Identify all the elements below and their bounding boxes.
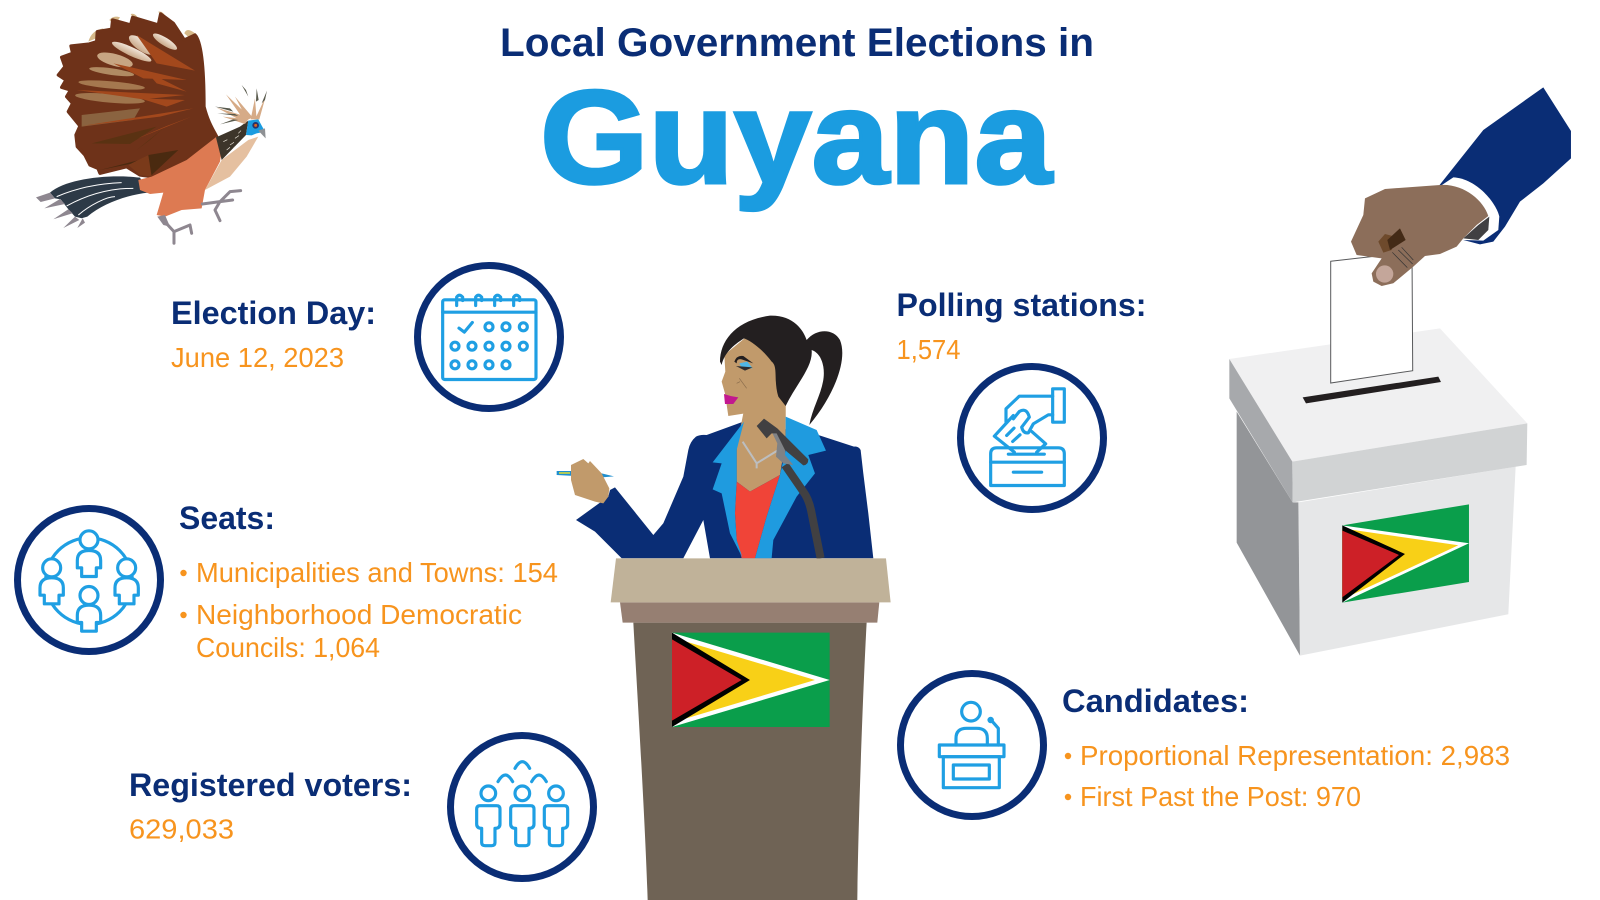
panel: candidates xyxy=(900,674,1510,816)
bullet list: Councils: 1,064 xyxy=(196,632,380,663)
icon: calendar xyxy=(418,266,560,408)
heading: Registered voters: xyxy=(129,767,412,803)
heading: Election Day: xyxy=(171,295,376,331)
icon: group of voters xyxy=(450,736,594,878)
flag on podium xyxy=(672,633,830,727)
bullet list xyxy=(1065,740,1510,812)
illustration: hoatzin bird xyxy=(36,12,267,243)
flag on ballot box xyxy=(1342,504,1469,603)
subtitle: Local Government Elections in xyxy=(500,21,1094,65)
bullet list: Proportional Representation: 2,983 xyxy=(1080,740,1510,771)
panel: election day xyxy=(171,266,560,408)
bullet list: First Past the Post: 970 xyxy=(1080,781,1361,812)
value: 1,574 xyxy=(896,334,960,365)
panel: polling stations xyxy=(896,287,1146,510)
illustration: woman speaking xyxy=(557,316,873,558)
country name: Guyana xyxy=(540,64,1053,212)
heading: Candidates: xyxy=(1062,683,1249,719)
panel: seats xyxy=(18,500,558,663)
value: 629,033 xyxy=(129,814,234,844)
illustration: ballot box xyxy=(1229,328,1527,656)
hand holding pen xyxy=(557,459,614,503)
bullet list xyxy=(180,557,558,663)
panel: registered voters xyxy=(129,736,594,878)
icon: candidate at lectern xyxy=(900,674,1044,816)
heading: Seats: xyxy=(179,500,275,536)
bullet list: Municipalities and Towns: 154 xyxy=(196,557,558,588)
bullet list: Neighborhood Democratic xyxy=(196,599,522,630)
title xyxy=(500,21,1094,212)
icon: hand and ballot box xyxy=(960,366,1104,510)
illustration: podium xyxy=(611,558,891,900)
illustration: hand casting vote xyxy=(1351,87,1571,286)
illustration: ballot paper xyxy=(1331,252,1413,383)
icon: connected people xyxy=(18,508,160,652)
value: June 12, 2023 xyxy=(171,342,344,373)
heading: Polling stations: xyxy=(896,287,1146,323)
